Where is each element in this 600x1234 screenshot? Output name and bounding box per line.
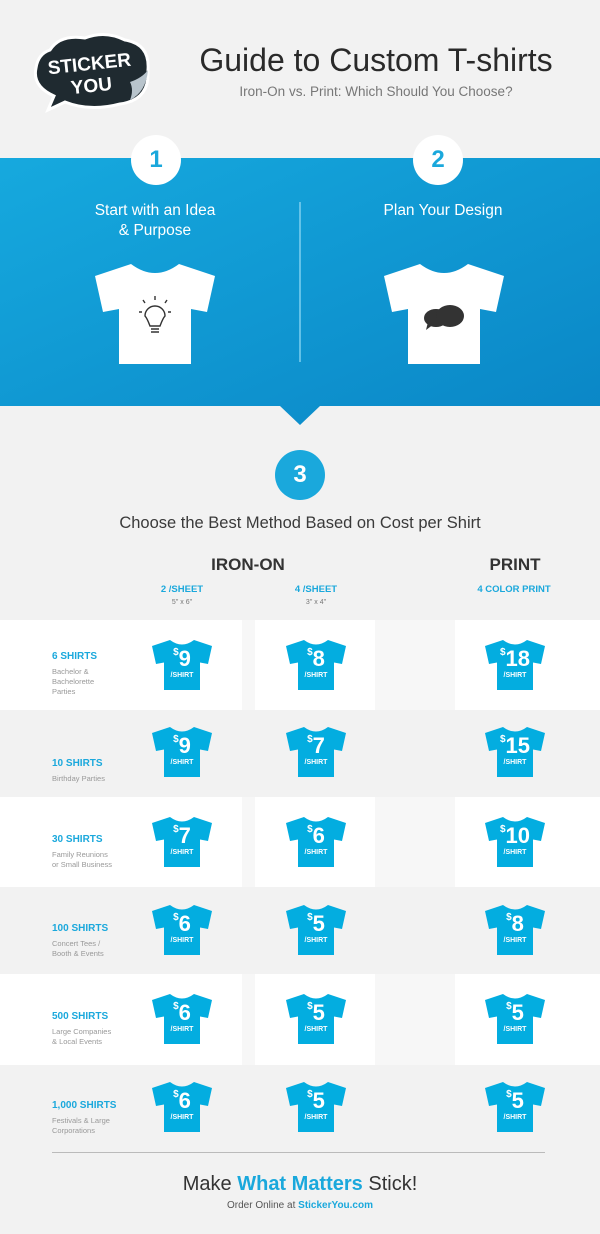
row: 10 shirts: $15 [500,733,530,758]
row: 100 shirts: Booth & Events [52,949,104,958]
blue band: steps 1 and 2 [0,135,600,425]
row: 1,000 shirts: /SHIRT [504,1114,526,1121]
row: 1,000 shirts: $6 [173,1088,191,1113]
row: 30 shirts: /SHIRT [171,849,193,856]
row: 10 shirts: 10 SHIRTS [52,758,103,769]
row: 6 shirts: /SHIRT [504,672,526,679]
logo: YOU [70,74,113,99]
sub header 4/sheet [295,584,337,606]
row: 10 shirts: /SHIRT [305,759,327,766]
step 3 circle: 3 [293,461,307,488]
row: 6 shirts: /SHIRT [305,672,327,679]
row: 6 shirts: Parties [52,687,75,696]
row: 30 shirts: $6 [307,823,325,848]
step 3 circle [275,450,325,500]
row: 100 shirts: $8 [506,911,524,936]
row: 6 shirts: Bachelor & [52,667,89,676]
row: 30 shirts: Family Reunions [52,850,108,859]
row: 30 shirts: $7 [173,823,191,848]
row: 500 shirts: 500 SHIRTS [52,1011,108,1022]
row: 1,000 shirts: $5 [307,1088,325,1113]
step 1 heading: Start with an Idea [95,202,215,219]
row: 100 shirts: Concert Tees / [52,939,100,948]
step 2 heading: Plan Your Design [384,202,502,219]
step 2 circle: 2 [431,146,445,173]
row: 100 shirts: /SHIRT [171,937,193,944]
icon: shirt with speech bubbles [384,264,504,364]
row: 1,000 shirts: 1,000 SHIRTS [52,1100,116,1111]
row: 10 shirts: /SHIRT [171,759,193,766]
step 1 circle [131,135,181,185]
row: 500 shirts: $5 [506,1000,524,1025]
logo: STICKER [47,50,132,79]
row: 10 shirts [0,710,600,797]
row: 1,000 shirts: /SHIRT [171,1114,193,1121]
row: 10 shirts: Birthday Parties [52,774,105,783]
row: 6 shirts: $8 [307,646,325,671]
row: 30 shirts: $10 [500,823,530,848]
row: 500 shirts: $6 [173,1000,191,1025]
row: 1,000 shirts: /SHIRT [305,1114,327,1121]
step 3 heading: Choose the Best Method Based on Cost per Shirt [119,514,481,532]
sub header 2/sheet: 2 /SHEET [161,584,203,595]
title: Guide to Custom T-shirts [199,42,553,78]
logo [34,33,150,112]
row: 500 shirts: /SHIRT [504,1026,526,1033]
row: 100 shirts: 100 SHIRTS [52,923,108,934]
row: 100 shirts [0,887,600,974]
row: 10 shirts: $9 [173,733,191,758]
row: 30 shirts: /SHIRT [305,849,327,856]
subtitle: Iron-On vs. Print: Which Should You Choose? [239,84,513,99]
row: 6 shirts: $9 [173,646,191,671]
row: 100 shirts: $6 [173,911,191,936]
footer tagline: Make What Matters Stick! [183,1173,417,1195]
step 2 circle [413,135,463,185]
footer order online: Order Online at StickerYou.com [227,1200,373,1211]
row: 500 shirts: Large Companies [52,1027,111,1036]
row: 6 shirts: Bachelorette [52,677,94,686]
row: 1,000 shirts: Festivals & Large [52,1116,110,1125]
row: 1,000 shirts [0,1065,600,1150]
row: 30 shirts: or Small Business [52,860,112,869]
icon: shirt with lightbulb [95,264,215,364]
sub header 2/sheet: 5" x 6" [172,599,192,606]
column header: iron-on: IRON-ON [211,555,285,574]
row: 30 shirts: /SHIRT [504,849,526,856]
row: 500 shirts: $5 [307,1000,325,1025]
row: 6 shirts [0,620,600,710]
column header: print: PRINT [490,555,540,574]
row: 30 shirts: 30 SHIRTS [52,834,103,845]
step 1 heading: & Purpose [119,222,191,239]
row: 100 shirts: $5 [307,911,325,936]
row: 500 shirts [0,974,600,1065]
row: 30 shirts [0,797,600,887]
sub header 4/sheet: 3" x 4" [306,599,326,606]
sub header 4/sheet: 4 /SHEET [295,584,337,595]
step 1 circle: 1 [149,146,163,173]
row: 1,000 shirts: Corporations [52,1126,95,1135]
step 1 heading [95,202,216,239]
sub header 4 color print: 4 COLOR PRINT [477,584,551,595]
row: 500 shirts: /SHIRT [171,1026,193,1033]
row: 500 shirts: /SHIRT [305,1026,327,1033]
row: 6 shirts: 6 SHIRTS [52,651,97,662]
row: 10 shirts: $7 [307,733,325,758]
row: 6 shirts: $18 [500,646,530,671]
row: 6 shirts: /SHIRT [171,672,193,679]
sub header 2/sheet [161,584,203,606]
row: 100 shirts: /SHIRT [305,937,327,944]
row: 500 shirts: & Local Events [52,1037,102,1046]
row: 100 shirts: /SHIRT [504,937,526,944]
row: 1,000 shirts: $5 [506,1088,524,1113]
row: 10 shirts: /SHIRT [504,759,526,766]
